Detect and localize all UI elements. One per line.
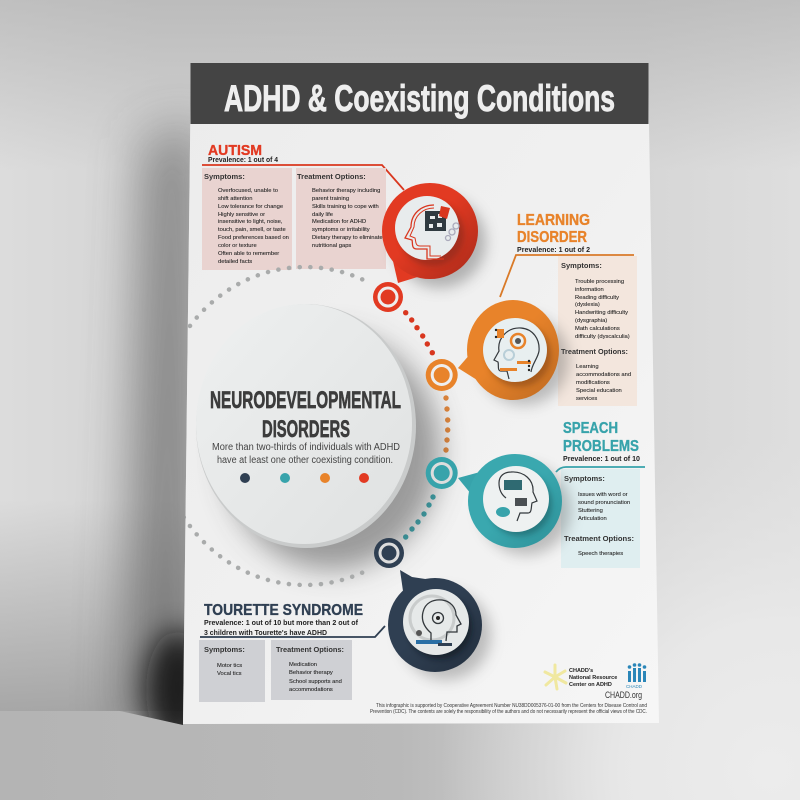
learning text box: information <box>575 287 604 293</box>
autism treatment box: symptoms or irritability <box>312 227 370 233</box>
autism symptoms box: Highly sensitive or <box>218 212 265 218</box>
autism symptoms box: Symptoms: <box>204 172 245 181</box>
speach text box: Treatment Options: <box>564 534 634 543</box>
autism symptoms box <box>202 168 292 270</box>
learning text box: Symptoms: <box>561 261 602 270</box>
learning text box: (dysgraphia) <box>575 318 607 324</box>
tourette treatment box: Treatment Options: <box>276 645 344 654</box>
learning connector line <box>500 255 634 297</box>
poster <box>157 63 659 724</box>
learning heading: LEARNING <box>517 212 590 229</box>
tourette connector line <box>200 626 385 637</box>
tourette heading: TOURETTE SYNDROME <box>204 602 363 619</box>
autism treatment box: Behavior therapy including <box>312 188 380 194</box>
autism symptoms box: color or texture <box>218 243 257 249</box>
autism treatment box: Dietary therapy to eliminate <box>312 235 383 241</box>
autism panel <box>202 142 404 270</box>
learning text box: Treatment Options: <box>561 347 628 356</box>
learning bubble <box>458 300 569 405</box>
tourette prevalence: Prevalence: 1 out of 10 but more than 2 out of <box>204 620 359 627</box>
learning text box: modifications <box>576 380 610 386</box>
learning text box: Handwriting difficulty <box>575 310 628 316</box>
tourette symptoms box: Symptoms: <box>204 645 245 654</box>
logo: CHADD people <box>626 663 646 689</box>
speach problems panel: PROBLEMS <box>563 438 639 455</box>
tourette symptoms box <box>199 640 265 702</box>
tourette treatment box <box>271 640 352 700</box>
learning text box: Learning <box>576 364 599 370</box>
connector ring: teal <box>426 457 458 489</box>
autism treatment box: Skills training to cope with <box>312 204 379 210</box>
speach text box: Stuttering <box>578 508 603 514</box>
speach prevalence: Prevalence: 1 out of 10 <box>563 456 640 463</box>
speach text box: Speech therapies <box>578 551 623 557</box>
tourette treatment box: Medication <box>289 662 317 668</box>
speach heading: SPEACH <box>563 420 618 437</box>
icon: yellow sunburst <box>545 665 566 689</box>
disc heading: NEURODEVELOPMENTAL <box>210 387 401 414</box>
tourette symptoms box: Motor tics <box>217 663 242 669</box>
connector ring: red <box>373 282 403 312</box>
disc heading line 2: DISORDERS <box>262 416 350 443</box>
disc body text: More than two-thirds of individuals with ADHD <box>212 442 400 453</box>
learning text box <box>558 256 637 406</box>
dotted gray arc <box>186 265 364 587</box>
autism symptoms box: Food preferences based on <box>218 235 289 241</box>
icon: head with target <box>410 596 461 646</box>
tourette treatment box: School supports and <box>289 679 342 685</box>
icon: head with puzzle <box>405 205 459 259</box>
website: CHADD.org <box>605 690 642 701</box>
speach bubble <box>458 454 571 555</box>
learning text box: Reading difficulty <box>575 295 619 301</box>
icon: head with speech boxes <box>496 472 537 521</box>
autism heading: AUTISM <box>208 142 262 159</box>
autism symptoms box: Often able to remember <box>218 251 279 257</box>
learning text box: Special education <box>576 388 622 394</box>
autism symptoms box: Low tolerance for change <box>218 204 283 210</box>
autism treatment box: parent training <box>312 196 349 202</box>
tourette treatment box: Behavior therapy <box>289 670 333 676</box>
coloured dotted connectors <box>403 310 450 540</box>
autism treatment box: Medication for ADHD <box>312 219 366 225</box>
learning text box: difficulty (dyscalculia) <box>575 334 630 340</box>
footer disclaimer: This infographic is supported by Cooperative Agreement Number NU38DD005376-01-00 from the Centers for Disease Control and <box>376 703 647 709</box>
learning prevalence: Prevalence: 1 out of 2 <box>517 247 590 254</box>
footer disclaimer: Prevention (CDC). The contents are solely the responsibility of the authors and do not necessarily represent the official views of the CDC. <box>370 709 647 715</box>
autism symptoms box: shift attention <box>218 196 252 202</box>
speach connector line <box>556 467 645 472</box>
four colour dots <box>240 473 369 483</box>
speach text box: Symptoms: <box>564 474 605 483</box>
learning disorder panel: DISORDER <box>517 229 587 246</box>
logo: CHADD national resource center: Center on ADHD <box>569 682 612 688</box>
speach text box: Issues with word or <box>578 492 628 498</box>
central disc: neurodevelopmental disorders <box>196 304 440 570</box>
learning text box: accommodations and <box>576 372 631 378</box>
learning text box: Math calculations <box>575 326 620 332</box>
autism symptoms box: touch, pain, smell, or taste <box>218 227 286 233</box>
speach problems panel <box>556 420 645 568</box>
tourette treatment box: accommodations <box>289 687 333 693</box>
speach text box <box>561 469 640 568</box>
tourette bubble <box>388 570 491 680</box>
autism prevalence: Prevalence: 1 out of 4 <box>208 157 278 164</box>
autism symptoms box: Overfocused, unable to <box>218 188 278 194</box>
autism treatment box: daily life <box>312 212 333 218</box>
logo: CHADD national resource center <box>545 665 617 689</box>
connector ring: orange <box>426 359 458 391</box>
autism symptoms box: insensitive to light, noise, <box>218 219 283 225</box>
title band <box>190 63 648 124</box>
logo text: CHADD's <box>569 668 593 674</box>
tourette syndrome panel: 3 children with Tourette's have ADHD <box>204 630 327 637</box>
autism symptoms box: detailed facts <box>218 259 252 265</box>
title: ADHD & Coexisting Conditions <box>224 78 615 119</box>
tourette syndrome panel <box>199 602 385 702</box>
autism bubble <box>382 183 486 288</box>
autism treatment box: Treatment Options: <box>297 172 366 181</box>
autism treatment box: nutritional gaps <box>312 243 351 249</box>
autism treatment box <box>296 168 386 269</box>
learning text box: (dyslexia) <box>575 302 600 308</box>
learning text box: services <box>576 396 597 402</box>
logo: CHADD national resource center: National Resource <box>569 675 617 681</box>
speach text box: Articulation <box>578 516 607 522</box>
speach text box: sound pronunciation <box>578 500 630 506</box>
logo: CHADD people: CHADD <box>626 684 643 689</box>
footer disclaimer <box>370 703 647 715</box>
tourette symptoms box: Vocal tics <box>217 671 242 677</box>
learning text box: Trouble processing <box>575 279 624 285</box>
learning disorder panel <box>500 212 637 406</box>
autism connector line <box>202 165 404 190</box>
icon: head with gears <box>494 328 539 379</box>
central disc: neurodevelopmental disorders: have at least one other coexisting condition. <box>217 455 393 466</box>
connector ring: navy <box>374 538 404 568</box>
